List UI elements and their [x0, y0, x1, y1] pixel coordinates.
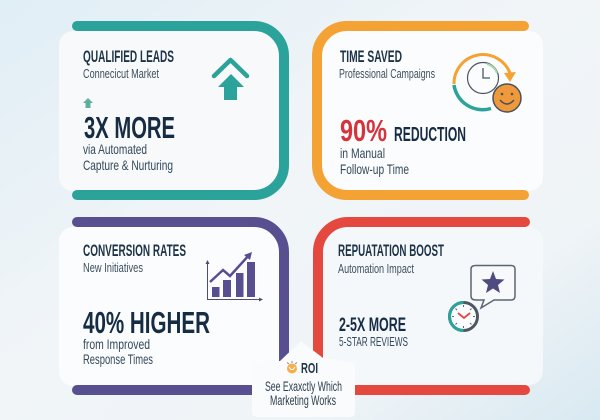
- description: automated capture: via Automated: [83, 141, 147, 157]
- description: 5-star reviews: 5-STAR REVIEWS: [339, 334, 408, 349]
- stat: 90% reduction: [340, 113, 466, 148]
- subheading: professional campaigns: Professional Campaigns: [339, 66, 435, 81]
- bracket: purple: [77, 222, 284, 390]
- panel: reputation boost: [318, 222, 543, 390]
- stat: 40% higher: 40% HIGHER: [83, 305, 210, 340]
- subheading: automation impact: Automation Impact: [338, 261, 414, 276]
- panel: conversion rates: Response Times: [83, 351, 153, 367]
- icon: double up arrow: [214, 60, 247, 100]
- panel: qualified leads: [59, 26, 285, 195]
- stat: 2-5x more: 2-5X MORE: [339, 315, 406, 336]
- card: qualified leads: [59, 31, 285, 191]
- card: time saved: [317, 31, 543, 191]
- bracket: red: [318, 222, 525, 390]
- bracket: orange: [317, 26, 524, 195]
- stat: 90% reduction: 90%: [340, 113, 387, 148]
- icon: roi badge: [287, 361, 297, 374]
- description: improved response: from Improved: [83, 336, 150, 352]
- heading: reputation boost: REPUATATION BOOST: [338, 241, 444, 260]
- callout background: [252, 341, 355, 417]
- panel: qualified leads: Capture & Nurturing: [83, 157, 173, 173]
- stat: 3x more: 3X MORE: [84, 110, 175, 145]
- description: manual follow-up: in Manual: [340, 145, 385, 161]
- panel: time saved: [317, 26, 543, 195]
- card: reputation boost: [318, 227, 543, 385]
- callout: roi: Marketing Works: [270, 393, 336, 408]
- subheading: connecticut market: Connecicut Market: [83, 66, 159, 81]
- panel: time saved: Follow-up Time: [340, 161, 409, 177]
- icon: clock and smiley: [454, 55, 521, 112]
- icon: small up arrow: [83, 98, 93, 108]
- heading: qualified leads: QUALIFIED LEADS: [83, 47, 174, 66]
- panel: conversion rates: [59, 222, 285, 390]
- card: conversion rates: [59, 227, 285, 386]
- callout title: ROI: [301, 360, 318, 377]
- bracket: teal: [77, 26, 284, 195]
- heading: time saved: TIME SAVED: [340, 47, 402, 66]
- icon: bar chart with arrow: [206, 252, 263, 302]
- stat: 90% reduction: REDUCTION: [394, 124, 466, 146]
- callout text: See Exaxctly Which: [265, 379, 342, 394]
- icon: speech bubble and clock: [450, 266, 515, 330]
- heading: conversion rates: CONVERSION RATES: [83, 241, 186, 260]
- callout: roi: [252, 341, 355, 417]
- subheading: new initiatives: New Initiatives: [83, 260, 143, 275]
